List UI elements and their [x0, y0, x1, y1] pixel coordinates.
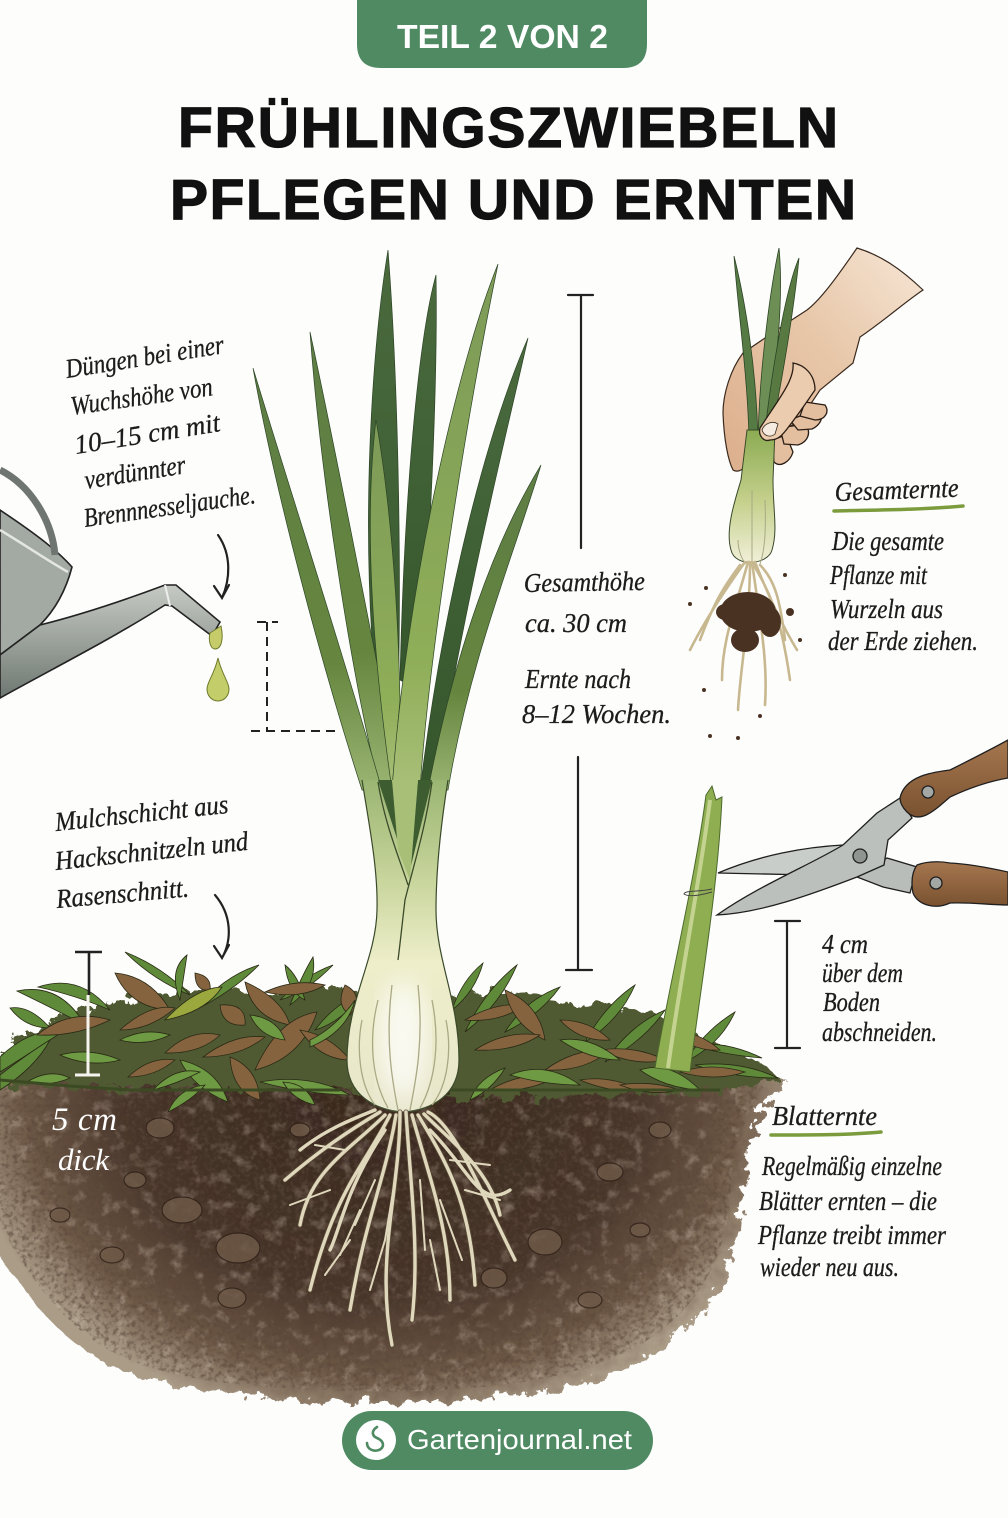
note: full harvest — [828, 473, 978, 656]
cut leaf stem — [655, 786, 722, 1072]
note: fertilising: Wuchshöhe von — [69, 371, 214, 421]
thumb — [760, 363, 815, 440]
leaves — [253, 250, 541, 790]
drops — [209, 626, 222, 649]
mulch layer — [0, 952, 780, 1112]
note: fertilising: 10–15 cm mit — [72, 407, 224, 460]
cut height marker — [775, 921, 800, 1048]
mulch thickness marker: 5 cm — [52, 1102, 117, 1138]
soil cross-section — [0, 1078, 785, 1404]
roots — [285, 1112, 515, 1345]
note: total height and harvest time: Gesamthöhe — [524, 566, 645, 598]
note: leaf harvest: Blatternte — [772, 1101, 877, 1131]
note: leaf harvest: wieder neu aus. — [760, 1252, 899, 1282]
note: total height and harvest time — [522, 566, 671, 729]
note: full harvest: Wurzeln aus — [830, 594, 943, 624]
note: total height and harvest time: 8–12 Wochen. — [522, 699, 671, 729]
note: leaf harvest: Blätter ernten – die — [759, 1186, 937, 1216]
header badge: TEIL 2 VON 2 — [397, 18, 608, 55]
note: leaf harvest — [757, 1101, 946, 1282]
note: full harvest: Gesamternte — [834, 473, 959, 507]
palm and arm — [723, 248, 923, 471]
garden shears — [717, 740, 1008, 915]
height dimension line — [566, 295, 593, 970]
note: mulch layer — [53, 789, 250, 914]
note: leaf harvest: Pflanze treibt immer — [757, 1220, 946, 1250]
title — [170, 96, 856, 232]
neck and bulb — [347, 780, 459, 1112]
arrow to mulch — [214, 895, 229, 958]
note: cut height: abschneiden. — [822, 1017, 937, 1047]
note: cut height: 4 cm — [822, 929, 868, 959]
footer badge — [342, 1411, 653, 1470]
mulch thickness marker — [52, 952, 117, 1177]
note: full harvest: der Erde ziehen. — [828, 626, 978, 656]
note: cut height: über dem — [822, 958, 903, 988]
title: FRÜHLINGSZWIEBELN — [178, 96, 838, 160]
watering can — [0, 470, 229, 701]
pebbles — [50, 1118, 671, 1308]
note: mulch layer: Rasenschnitt. — [54, 872, 190, 914]
note: mulch layer: Hackschnitzeln und — [53, 826, 250, 876]
note: fertilising: verdünnter — [82, 449, 188, 495]
note: total height and harvest time: Ernte nach — [524, 664, 631, 694]
dashed growth height marker — [251, 622, 337, 732]
lower fingers — [772, 402, 827, 464]
note: mulch layer: Mulchschicht aus — [53, 789, 230, 837]
mulch thickness marker: dick — [58, 1142, 110, 1177]
spout — [0, 585, 220, 698]
note: fertilising: Brennnesseljauche. — [82, 479, 257, 533]
lower arm — [857, 858, 917, 893]
body — [0, 510, 72, 655]
whole plant harvest illustration — [688, 248, 923, 740]
stem and bulb — [729, 430, 775, 562]
icon: logo — [356, 1420, 396, 1460]
footer badge: Gartenjournal.net — [407, 1424, 632, 1455]
note: cut height: Boden — [823, 987, 880, 1017]
lower blade and pivot — [717, 798, 912, 915]
plant leaves — [734, 248, 799, 450]
handle — [0, 470, 55, 555]
roots and clinging soil — [690, 562, 797, 710]
note: total height and harvest time: ca. 30 cm — [525, 608, 627, 638]
header badge — [357, 0, 647, 68]
main plant: spring onion — [253, 250, 541, 1345]
upper blade — [718, 845, 860, 875]
title: PFLEGEN UND ERNTEN — [170, 168, 856, 232]
note: fertilising: Düngen bei einer — [62, 329, 226, 384]
note: cut height — [822, 929, 937, 1047]
note: leaf harvest: Regelmäßig einzelne — [761, 1151, 942, 1181]
arrow to drop — [214, 535, 229, 598]
note: full harvest: Pflanze mit — [829, 560, 928, 590]
handles — [900, 740, 1008, 817]
note: fertilising — [62, 329, 257, 533]
note: full harvest: Die gesamte — [831, 526, 944, 556]
